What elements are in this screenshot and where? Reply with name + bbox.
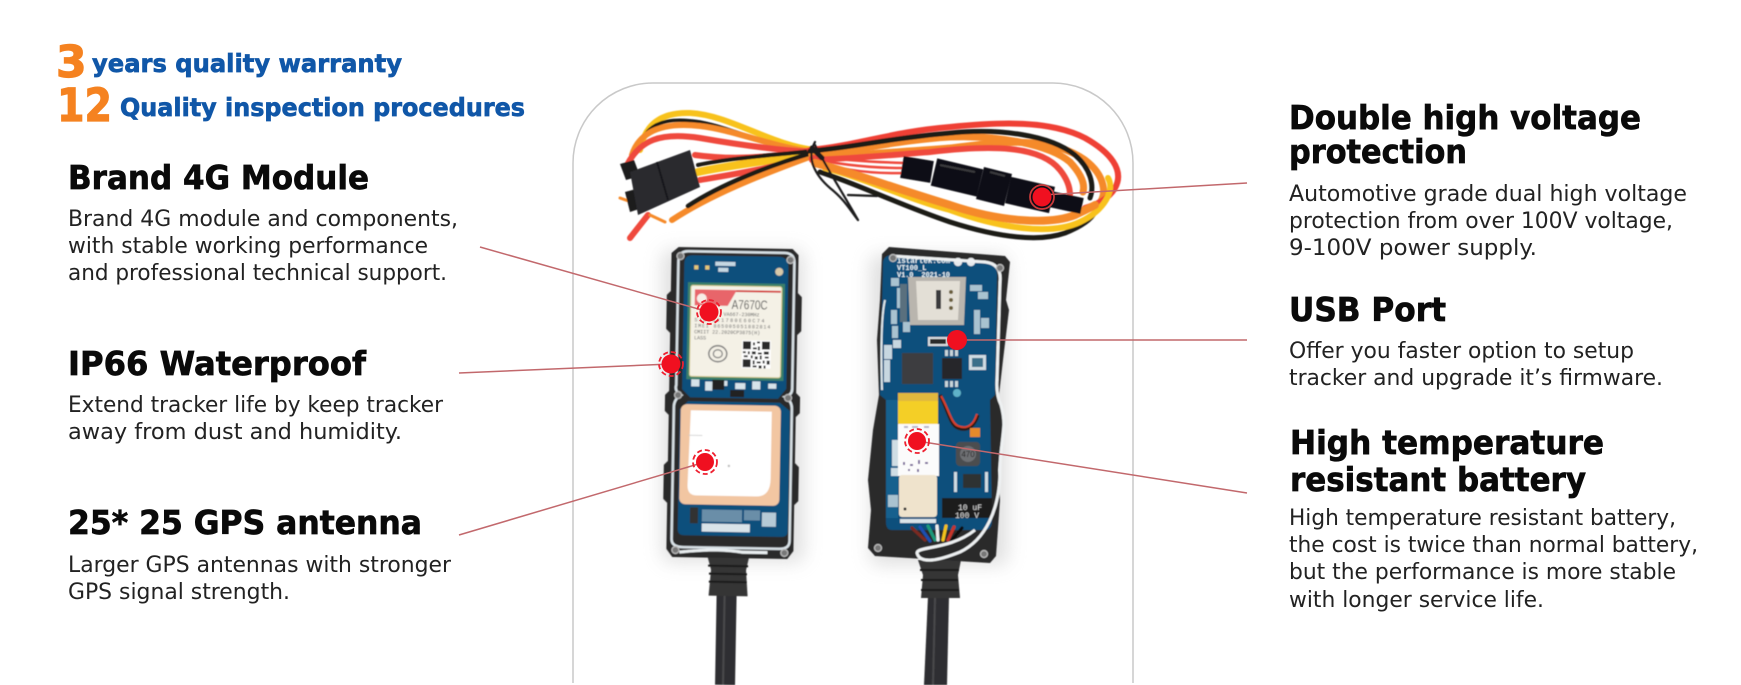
wires: right bundle bbox=[810, 124, 1118, 238]
text block: USB Port: Offer you faster option to setup bbox=[1289, 339, 1634, 364]
capacitor label: 10 uF bbox=[958, 504, 982, 513]
marker: battery bbox=[905, 429, 929, 453]
text block: GPS antenna bbox=[68, 503, 452, 605]
device: front side with module and antenna bbox=[660, 247, 803, 685]
white gasket wire bbox=[892, 256, 1004, 560]
text block: IP66 Waterproof: away from dust and humidity. bbox=[68, 420, 402, 445]
wire harness bbox=[620, 113, 1118, 238]
4G module: CMIIT 22.2020CP3875(H) bbox=[694, 329, 760, 336]
leader line: high voltage protection bbox=[1042, 183, 1247, 195]
case bbox=[868, 247, 1010, 563]
leader line: battery bbox=[917, 441, 1247, 493]
screws bbox=[874, 254, 1004, 558]
board silkscreen: VT100_L bbox=[897, 265, 926, 273]
text block: High temperature resistant battery: High temperature bbox=[1290, 423, 1604, 462]
text block: Brand 4G Module: Brand 4G module and components, bbox=[68, 207, 458, 232]
device: back side with SIM tray and battery bbox=[868, 247, 1010, 685]
text block: High temperature resistant battery: with longer service life. bbox=[1289, 588, 1544, 613]
text block: GPS antenna: 25* 25 GPS antenna bbox=[68, 503, 422, 542]
heading: quality warranty claims bbox=[56, 37, 525, 132]
4G module: VA667-230MHz bbox=[723, 312, 760, 318]
board silkscreen: V1.0 2021-10 bbox=[897, 272, 950, 280]
panel: rounded product frame bbox=[573, 83, 1133, 683]
text block: USB Port: USB Port bbox=[1289, 290, 1446, 329]
colored wire stubs bbox=[912, 526, 962, 541]
text block: Brand 4G Module bbox=[68, 158, 458, 286]
inductor: 470 bbox=[961, 450, 975, 459]
capacitor label bbox=[942, 498, 992, 521]
text block: GPS antenna: Larger GPS antennas with stronger bbox=[68, 553, 452, 578]
marker: USB port bbox=[947, 330, 967, 350]
wires: left loops bbox=[620, 113, 815, 238]
marker: fuse protection bbox=[1030, 185, 1054, 209]
text block: IP66 Waterproof bbox=[68, 344, 444, 445]
pads bbox=[954, 258, 975, 266]
text block: High temperature resistant battery: High temperature resistant battery, bbox=[1289, 506, 1676, 531]
soft product shadows bbox=[662, 250, 1008, 565]
text block: IP66 Waterproof: IP66 Waterproof bbox=[68, 344, 367, 383]
cable and strain relief bbox=[705, 556, 749, 685]
4G module: IMEI 865005051882814 bbox=[694, 323, 770, 331]
board silkscreen bbox=[897, 256, 950, 280]
warranty number 3: 3 bbox=[56, 37, 87, 88]
battery lead wires bbox=[940, 395, 978, 429]
cable and strain relief bbox=[918, 560, 961, 685]
text block: Double high voltage protection: protection from over 100V voltage, bbox=[1289, 209, 1673, 234]
marker: 4G module bbox=[697, 300, 721, 324]
leader line: IP66 Waterproof bbox=[459, 364, 671, 373]
wire connector bbox=[620, 150, 700, 215]
leader line: GPS antenna bbox=[459, 462, 705, 535]
marker: GPS antenna bbox=[693, 450, 717, 474]
text block: Brand 4G Module: with stable working performance bbox=[68, 234, 428, 259]
capacitor label: 100 V bbox=[955, 512, 979, 521]
text block: Brand 4G Module: Brand 4G Module bbox=[68, 158, 369, 197]
text block: High temperature resistant battery bbox=[1289, 423, 1698, 613]
inspection number 12: 12 bbox=[57, 79, 112, 132]
case bbox=[662, 247, 803, 559]
text block: High temperature resistant battery: the cost is twice than normal battery, bbox=[1289, 533, 1698, 558]
text block: High temperature resistant battery: resistant battery bbox=[1290, 460, 1586, 499]
circuit board bbox=[678, 255, 793, 537]
text block: USB Port bbox=[1289, 290, 1663, 391]
marker: waterproof seal bbox=[659, 352, 683, 376]
board silkscreen: istartek.com bbox=[897, 256, 950, 266]
4G module bbox=[686, 282, 785, 381]
4G module: A7670C bbox=[732, 297, 768, 313]
text block: USB Port: tracker and upgrade it’s firmware. bbox=[1289, 366, 1663, 391]
leader line: USB port bbox=[957, 339, 1247, 341]
text block: Double high voltage protection: 9-100V power supply. bbox=[1289, 236, 1537, 261]
inductor bbox=[954, 442, 988, 492]
warranty text: years quality warranty bbox=[92, 49, 402, 78]
Bluetooth module bbox=[899, 475, 937, 523]
gasket seal bbox=[671, 251, 795, 549]
leader line: Brand 4G Module bbox=[480, 247, 709, 312]
inline fuse holder bbox=[902, 165, 1082, 206]
text block: Double high voltage protection: Double high voltage bbox=[1289, 98, 1641, 137]
chips bbox=[902, 337, 986, 387]
text block: GPS antenna: GPS signal strength. bbox=[68, 580, 290, 605]
SIM tray bbox=[900, 277, 966, 325]
text block: Double high voltage protection: Automotive grade dual high voltage bbox=[1289, 182, 1687, 207]
circuit board bbox=[880, 255, 997, 530]
battery bbox=[898, 393, 939, 476]
text block: IP66 Waterproof: Extend tracker life by keep tracker bbox=[68, 393, 444, 418]
screws bbox=[672, 253, 794, 557]
text block: High temperature resistant battery: but the performance is more stable bbox=[1289, 560, 1676, 585]
text block: Double high voltage protection: protection bbox=[1289, 132, 1467, 171]
GPS antenna bbox=[679, 404, 781, 506]
text block: Double high voltage protection bbox=[1289, 98, 1687, 261]
4G module: LASS bbox=[694, 335, 706, 342]
4G module: S/N:S21780E60C74 bbox=[694, 317, 764, 325]
twist tie bbox=[811, 142, 877, 220]
inspection text: Quality inspection procedures bbox=[120, 93, 525, 122]
QR code bbox=[742, 340, 771, 369]
text block: Brand 4G Module: and professional technical support. bbox=[68, 261, 447, 286]
